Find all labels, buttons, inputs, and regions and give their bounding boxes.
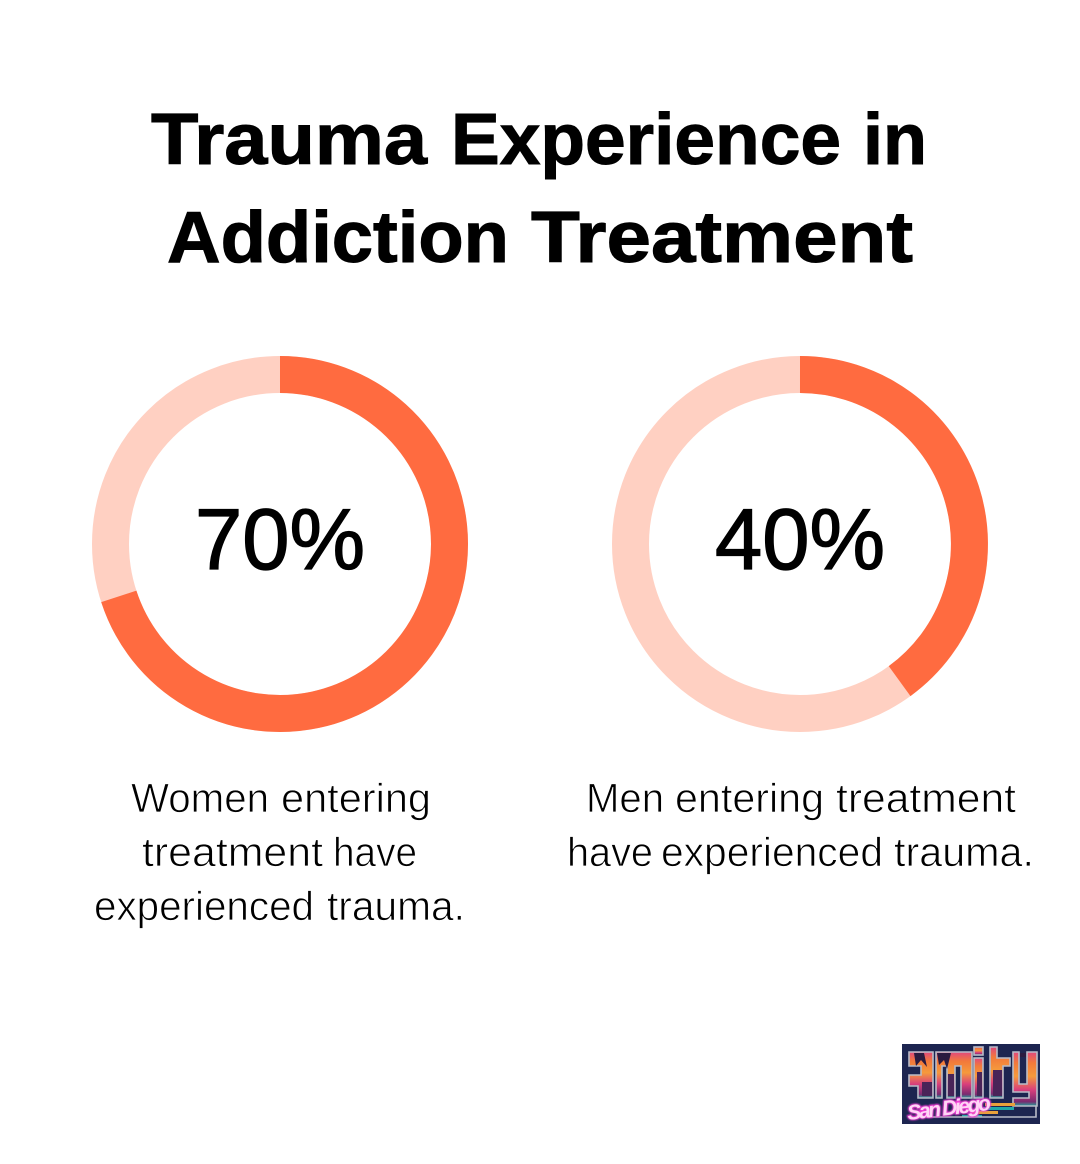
title: Experience	[451, 100, 841, 180]
value label 70%: 70%	[195, 492, 365, 588]
donut value 70%	[119, 374, 449, 714]
caption: men: entering	[675, 775, 824, 821]
caption: men: trauma.	[894, 829, 1034, 875]
logo letter blocks	[909, 1047, 1037, 1106]
caption: men: have	[567, 829, 653, 875]
caption: women: Women	[131, 775, 269, 821]
caption: women: trauma.	[327, 883, 465, 929]
logo script text: San Diego	[906, 1092, 992, 1125]
caption: women: treatment	[142, 829, 324, 875]
caption: women: have	[333, 829, 417, 875]
title: Trauma	[151, 100, 428, 180]
caption: men: treatment	[836, 775, 1017, 821]
logo palm silhouettes	[914, 1053, 1026, 1069]
caption: men	[567, 775, 1034, 875]
logo outline tail	[919, 1106, 1036, 1117]
logo script text glow: San Diego	[906, 1092, 992, 1125]
panel: women donut chart	[110, 374, 450, 714]
title: Addiction	[167, 198, 509, 278]
donut value 40%	[800, 374, 969, 681]
title: Treatment	[531, 198, 913, 278]
donut track	[110, 374, 450, 714]
caption: men: Men	[586, 775, 664, 821]
caption: men: experienced	[661, 829, 883, 875]
caption: women: experienced	[94, 883, 314, 929]
value label 40%: 40%	[715, 492, 885, 588]
title	[151, 100, 927, 278]
logo city skyline	[922, 1070, 1002, 1096]
donut track	[630, 374, 970, 714]
caption: women: entering	[281, 775, 431, 821]
title: in	[863, 100, 927, 180]
caption: women	[94, 775, 465, 929]
logo beach stripes	[962, 1103, 1015, 1117]
logo: Amity San Diego	[902, 1044, 1040, 1125]
panel: men donut chart	[630, 374, 970, 714]
